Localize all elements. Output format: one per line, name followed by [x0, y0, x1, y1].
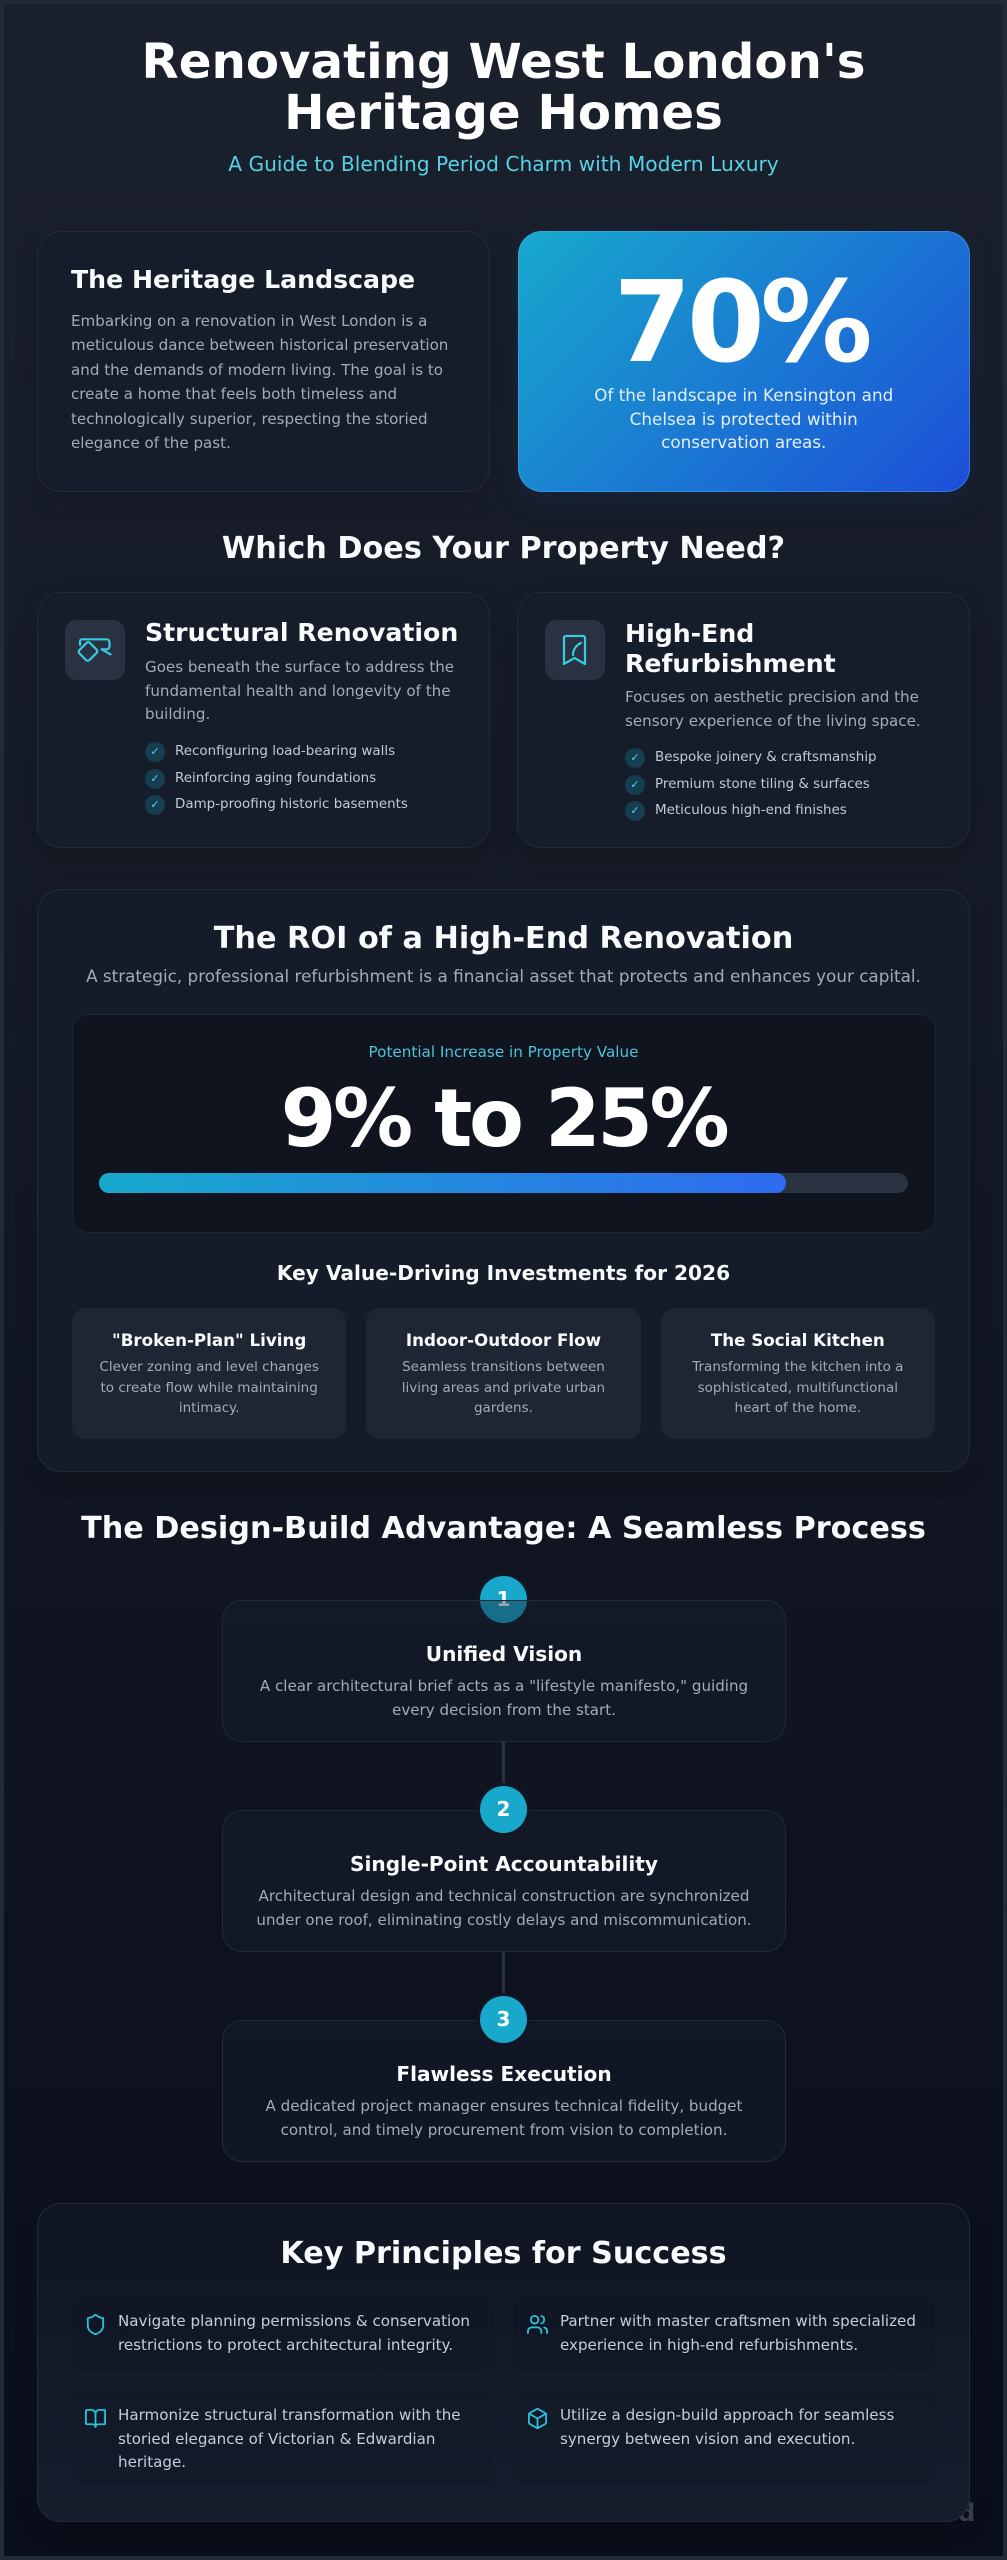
- card: the social kitchen: Transforming the kitchen into a: [692, 1359, 903, 1375]
- step 1 number badge: [480, 1576, 527, 1623]
- panel: 70% statistic: [518, 231, 970, 492]
- list: structural items: ✓: [150, 772, 160, 784]
- list: refurbishment items: ✓: [630, 804, 640, 817]
- heading: high-end refurbishment: Refurbishment: [625, 649, 836, 678]
- list: structural items: ✓: [150, 798, 160, 811]
- text: heritage intro: [71, 312, 448, 452]
- panel: roi: [37, 889, 970, 1472]
- step 3 card: [222, 2020, 786, 2162]
- connector 1 to 2: [502, 1742, 505, 1784]
- heading: key value-driving investments: Key Value-Driving Investments for 2026: [277, 1261, 730, 1285]
- heading: the heritage landscape: The Heritage Landscape: [71, 265, 415, 294]
- text: heritage intro: Embarking on a renovation in West London is a: [71, 312, 427, 330]
- stat caption: [594, 385, 893, 452]
- stat: 9% to 25%: 9% to 25%: [281, 1072, 726, 1165]
- card: indoor-outdoor flow: [366, 1308, 641, 1438]
- heading: which does your property need: Which Does Your Property Need?: [222, 531, 785, 566]
- icon: box: [528, 2408, 548, 2429]
- watermark fragment: d: [958, 2499, 975, 2527]
- principle: planning: [72, 2298, 493, 2370]
- list: refurbishment items: ✓: [630, 778, 640, 790]
- icon: book: [85, 2409, 106, 2428]
- stat caption: Chelsea is protected within: [630, 409, 858, 429]
- icon: shield: [86, 2314, 104, 2335]
- card: the social kitchen: sophisticated, multifunctional: [698, 1380, 898, 1396]
- card: the social kitchen: The Social Kitchen: [711, 1330, 885, 1350]
- icon: bookmark: [544, 620, 604, 680]
- heading: structural renovation: Structural Renovation: [145, 618, 458, 647]
- list: structural items: [145, 742, 408, 815]
- list: structural items: Reinforcing aging foundations: [175, 770, 376, 786]
- text: heritage intro: and the demands of modern living. The goal is to: [71, 361, 443, 379]
- step 1 number badge: 1: [497, 1587, 510, 1611]
- title: Heritage Homes: [284, 84, 723, 140]
- principle: design-build: Utilize a design-build approach for seamless: [560, 2406, 894, 2424]
- connector 2 to 3: [502, 1952, 505, 1994]
- text: structural description: fundamental health and longevity of the: [145, 682, 451, 700]
- principle: harmonize: storied elegance of Victorian & Edwardian: [118, 2430, 435, 2448]
- text: refurbishment description: [625, 688, 921, 730]
- list: refurbishment items: ✓: [630, 750, 640, 764]
- principle: harmonize: heritage.: [118, 2453, 186, 2471]
- step 2 card: [222, 1810, 786, 1952]
- list: refurbishment items: Premium stone tiling & surfaces: [655, 776, 870, 792]
- step 1 card: every decision from the start.: [392, 1701, 616, 1719]
- card: broken-plan living: [72, 1308, 346, 1438]
- subtitle: A Guide to Blending Period Charm with Modern Luxury: [228, 152, 779, 176]
- step 1 card: Unified Vision: [426, 1642, 582, 1666]
- label: potential increase: Potential Increase in Property Value: [369, 1043, 638, 1061]
- card: indoor-outdoor flow: Seamless transitions between: [402, 1359, 605, 1375]
- principle: design-build: [514, 2392, 935, 2486]
- card: the social kitchen: heart of the home.: [735, 1400, 861, 1416]
- list: structural items: Reconfiguring load-bearing walls: [175, 744, 395, 759]
- text: structural description: building.: [145, 705, 210, 723]
- text: refurbishment description: sensory experience of the living space.: [625, 712, 921, 730]
- step 3 card: control, and timely procurement from vision to completion.: [281, 2121, 727, 2139]
- card: indoor-outdoor flow: gardens.: [474, 1400, 533, 1416]
- text: refurbishment description: Focuses on aesthetic precision and the: [625, 688, 919, 706]
- principle: craftsmen: experience in high-end refurbishments.: [560, 2336, 858, 2354]
- principle: planning: restrictions to protect architectural integrity.: [118, 2336, 453, 2354]
- step 1 card: A clear architectural brief acts as a "lifestyle manifesto," guiding: [260, 1677, 748, 1695]
- heading: high-end refurbishment: High-End: [625, 618, 754, 648]
- heading: key principles: Key Principles for Success: [280, 2236, 727, 2270]
- panel: structural renovation: [37, 592, 490, 848]
- stat number: 70%: [613, 258, 868, 388]
- step 2 card: Single-Point Accountability: [350, 1852, 658, 1876]
- text: heritage intro: meticulous dance between historical preservation: [71, 336, 448, 354]
- step 3 card: A dedicated project manager ensures technical fidelity, budget: [266, 2097, 742, 2115]
- card: broken-plan living: Clever zoning and level changes: [99, 1359, 319, 1375]
- stat caption: conservation areas.: [661, 432, 826, 452]
- icon: structural: [65, 620, 125, 680]
- principle: craftsmen: [514, 2298, 935, 2370]
- heading: roi: The ROI of a High-End Renovation: [214, 921, 793, 956]
- card: indoor-outdoor flow: Indoor-Outdoor Flow: [406, 1330, 601, 1350]
- step 3 card: Flawless Execution: [396, 2062, 612, 2086]
- principle: harmonize: Harmonize structural transformation with the: [118, 2406, 461, 2424]
- text: structural description: [145, 658, 454, 723]
- card: the social kitchen: [661, 1308, 935, 1438]
- icon: users: [527, 2315, 548, 2334]
- list: structural items: Damp-proofing historic basements: [175, 797, 408, 812]
- step 3 number badge: [480, 1996, 527, 2043]
- stat caption: Of the landscape in Kensington and: [594, 385, 893, 405]
- card: broken-plan living: to create flow while maintaining: [101, 1380, 318, 1396]
- title: Renovating West London's: [142, 34, 865, 90]
- text: heritage intro: technologically superior, respecting the storied: [71, 410, 428, 428]
- panel: property value: [72, 1014, 936, 1233]
- principle: craftsmen: Partner with master craftsmen with specialized: [560, 2312, 916, 2330]
- panel: key principles: [37, 2203, 970, 2522]
- list: refurbishment items: Bespoke joinery & craftsmanship: [655, 750, 877, 764]
- card: indoor-outdoor flow: living areas and private urban: [402, 1380, 605, 1396]
- step 3 number badge: 3: [497, 2007, 510, 2031]
- panel: high-end refurbishment: [517, 592, 970, 848]
- list: structural items: ✓: [150, 745, 160, 758]
- list: refurbishment items: Meticulous high-end finishes: [655, 803, 847, 818]
- text: heritage intro: elegance of the past.: [71, 434, 231, 452]
- principle: harmonize: [72, 2392, 493, 2486]
- panel: the heritage landscape: [37, 231, 490, 492]
- title: [142, 34, 865, 140]
- progress bar fill: [99, 1173, 786, 1193]
- heading: high-end refurbishment: [625, 618, 836, 678]
- step 2 card: Architectural design and technical construction are synchronized: [259, 1887, 749, 1905]
- text: roi subtitle: A strategic, professional refurbishment is a financial asset that protects and enhances your capital.: [86, 966, 921, 986]
- text: heritage intro: create a home that feels both timeless and: [71, 385, 397, 403]
- step 2 card: under one roof, eliminating costly delays and miscommunication.: [256, 1911, 752, 1929]
- step 2 number badge: [480, 1786, 527, 1833]
- step 1 card: [222, 1600, 786, 1742]
- heading: design-build advantage: The Design-Build Advantage: A Seamless Process: [81, 1511, 926, 1546]
- text: structural description: Goes beneath the surface to address the: [145, 658, 454, 676]
- principle: design-build: synergy between vision and execution.: [560, 2430, 855, 2448]
- principle: planning: Navigate planning permissions & conservation: [118, 2312, 470, 2330]
- card: broken-plan living: intimacy.: [179, 1400, 239, 1416]
- progress bar: [99, 1173, 908, 1193]
- card: broken-plan living: "Broken-Plan" Living: [112, 1330, 306, 1350]
- step 2 number badge: 2: [497, 1797, 510, 1821]
- list: refurbishment items: [625, 748, 877, 821]
